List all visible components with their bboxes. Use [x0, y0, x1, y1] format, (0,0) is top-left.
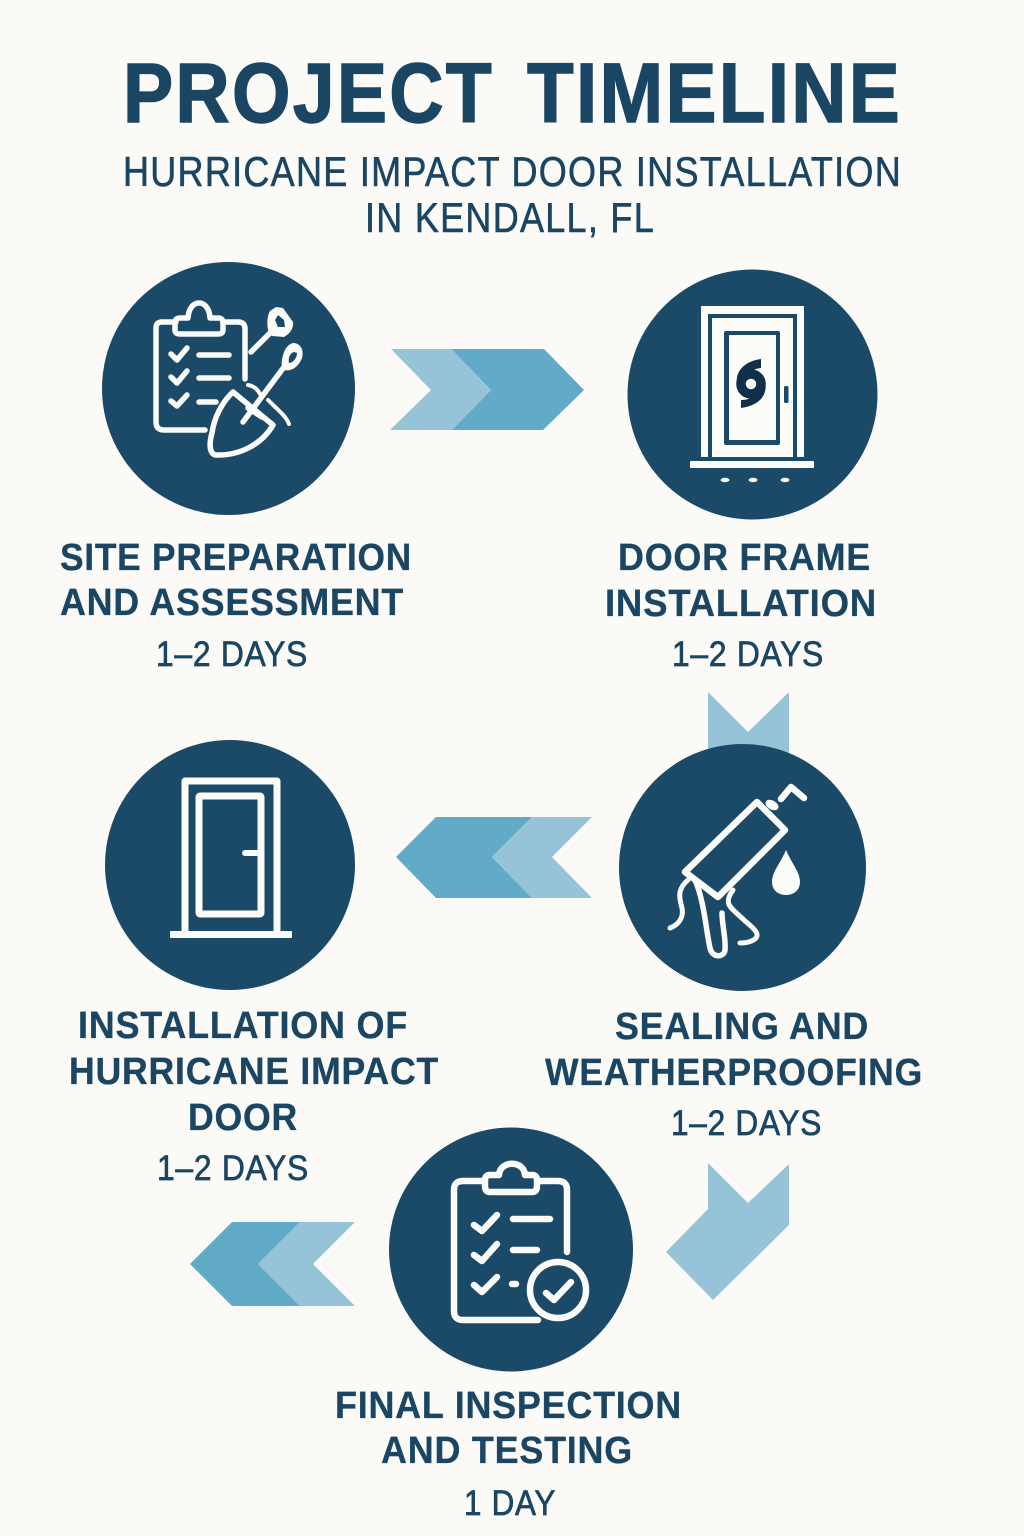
- panel: step 2 icon, door frame: [628, 270, 878, 520]
- arrow: step 4 to step 5: [666, 1163, 789, 1300]
- panel: step 5 icon, inspection checklist: [389, 1128, 633, 1372]
- panel: step 1 icon, clipboard and shovel: [102, 262, 355, 515]
- subtitle: [123, 148, 902, 241]
- subtitle: HURRICANE IMPACT DOOR INSTALLATION: [123, 148, 902, 195]
- text: step 4 label: 1–2 DAYS: [157, 1149, 309, 1188]
- panel: step 3 icon, caulk gun: [619, 744, 866, 991]
- text: step 4 label: [69, 1005, 439, 1188]
- title: [123, 46, 902, 140]
- text: step 2 label: [605, 537, 877, 674]
- icon: door: [170, 781, 292, 938]
- text: step 1 label: [60, 537, 412, 674]
- text: step 2 label: INSTALLATION: [605, 583, 877, 625]
- icon: water drop: [772, 850, 800, 895]
- text: step 5 label: AND TESTING: [381, 1430, 633, 1472]
- panel: step 4 icon, impact door: [105, 740, 355, 990]
- text: step 3 label: SEALING AND: [615, 1006, 869, 1048]
- text: step 5 label: 1 DAY: [464, 1484, 556, 1523]
- arrow: step 1 to step 2: [390, 349, 584, 430]
- icon: caulk nozzle: [764, 798, 780, 812]
- arrow: step 3 to step 4: [396, 817, 592, 898]
- text: step 1 label: SITE PREPARATION: [60, 537, 412, 579]
- subtitle: IN KENDALL, FL: [365, 194, 655, 241]
- text: step 1 label: AND ASSESSMENT: [60, 582, 404, 624]
- text: step 3 label: WEATHERPROOFING: [545, 1052, 923, 1094]
- text: step 2 label: DOOR FRAME: [618, 537, 871, 579]
- icon: door frame: [690, 306, 814, 482]
- text: step 5 label: FINAL INSPECTION: [335, 1385, 682, 1427]
- icon: shovel and pick: [210, 307, 303, 455]
- text: step 3 label: [545, 1006, 923, 1143]
- text: step 1 label: 1–2 DAYS: [156, 635, 308, 674]
- icon: hurricane symbol: [737, 359, 766, 408]
- icon: caulk gun: [670, 787, 804, 956]
- text: step 4 label: INSTALLATION OF: [78, 1005, 408, 1047]
- text: step 3 label: 1–2 DAYS: [671, 1104, 822, 1143]
- icon: clipboard: [156, 303, 245, 430]
- title: PROJECT: [123, 46, 494, 140]
- text: step 4 label: HURRICANE IMPACT: [69, 1051, 439, 1093]
- icon: checklist: [454, 1164, 567, 1320]
- text: step 4 label: DOOR: [188, 1097, 298, 1139]
- title: TIMELINE: [527, 46, 902, 140]
- arrow: step 5 back: [190, 1222, 355, 1306]
- text: step 5 label: [335, 1385, 682, 1523]
- icon: check badge: [530, 1262, 586, 1318]
- text: step 2 label: 1–2 DAYS: [672, 635, 824, 674]
- arrow: step 2 to step 3: [708, 692, 789, 770]
